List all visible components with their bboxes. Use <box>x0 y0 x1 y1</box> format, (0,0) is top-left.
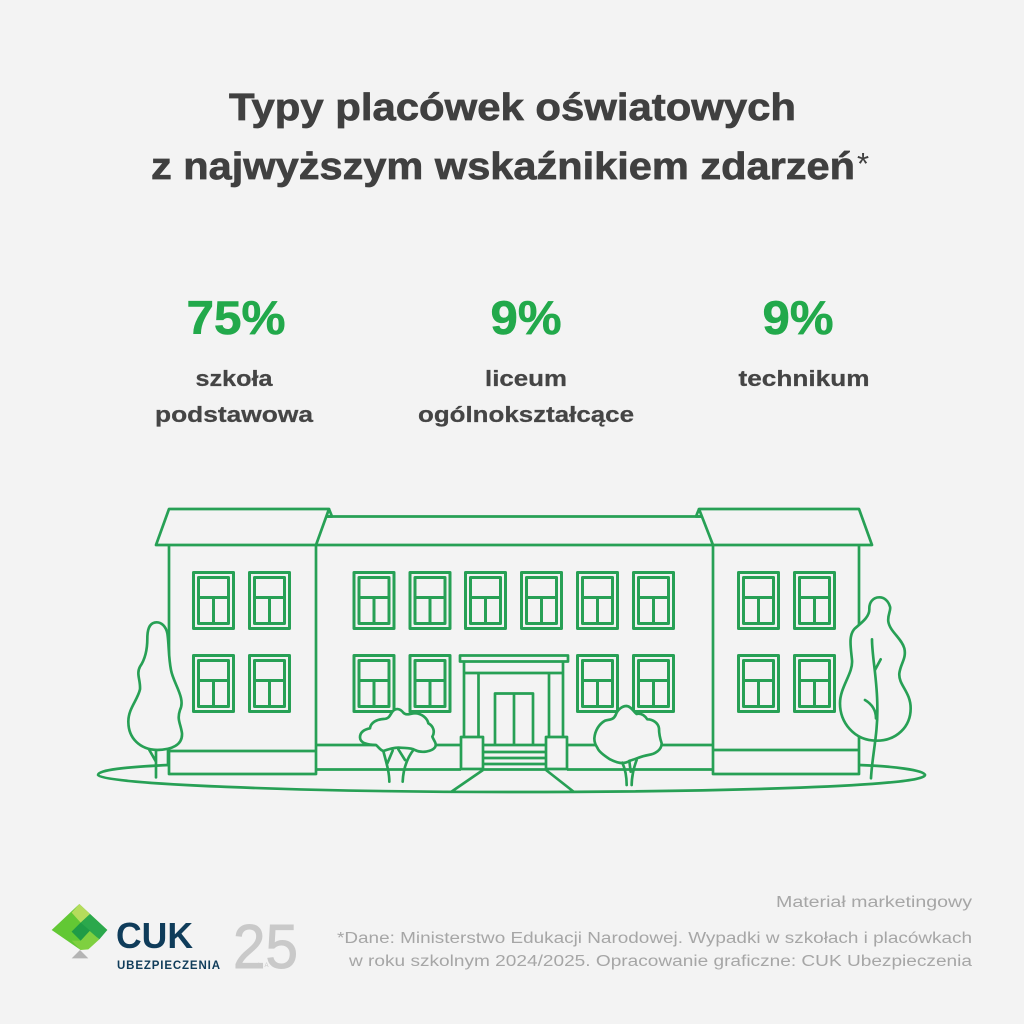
stat: liceum ogólnokształcące: 9% <box>490 291 562 344</box>
logo: 25 lat anniversary: 25 <box>233 913 298 982</box>
stat: liceum ogólnokształcące: liceum <box>485 366 567 391</box>
right wing <box>713 545 859 774</box>
footer note: Materiał marketingowy <box>776 894 972 911</box>
stat: szkoła podstawowa: szkoła <box>196 366 273 391</box>
central roof <box>316 516 713 545</box>
plinth lines <box>316 745 713 770</box>
title: Typy placówek oświatowych <box>229 87 796 129</box>
ground ellipse <box>98 765 925 792</box>
building illustration <box>98 509 925 792</box>
logo: CUK diamond <box>52 904 107 958</box>
bush left <box>360 709 436 782</box>
logo: CUK wordmark <box>116 915 220 972</box>
title <box>151 87 869 188</box>
logo: CUK wordmark: CUK <box>116 915 193 956</box>
bush right <box>594 706 662 785</box>
stat: szkoła podstawowa: 75% <box>186 291 286 344</box>
footer note: *Dane: Ministerstwo Edukacji Narodowej. Wypadki w szkołach i placówkach <box>337 930 972 947</box>
footer note <box>337 894 972 970</box>
left wing roof <box>156 509 329 545</box>
left wing <box>169 545 316 774</box>
windows upper row <box>194 572 834 628</box>
entrance portico <box>451 656 574 792</box>
right wing roof <box>699 509 872 545</box>
stat: technikum: technikum <box>738 366 870 391</box>
logo: CUK wordmark: UBEZPIECZENIA <box>117 960 220 972</box>
stat: liceum ogólnokształcące <box>418 291 634 427</box>
windows lower row <box>194 656 834 712</box>
roof joints <box>326 509 702 516</box>
footer note: w roku szkolnym 2024/2025. Opracowanie graficzne: CUK Ubezpieczenia <box>348 953 972 970</box>
stat: technikum <box>738 291 870 391</box>
title: * <box>857 146 869 181</box>
logo: 25 lat anniversary: LAT <box>258 963 275 969</box>
tree left <box>128 622 182 777</box>
stat: szkoła podstawowa <box>155 291 314 427</box>
stat: liceum ogólnokształcące: ogólnokształcące <box>418 402 634 427</box>
tree right <box>840 597 911 778</box>
stat: szkoła podstawowa: podstawowa <box>155 402 314 427</box>
stat: technikum: 9% <box>762 291 834 344</box>
title: z najwyższym wskaźnikiem zdarzeń <box>151 146 855 188</box>
